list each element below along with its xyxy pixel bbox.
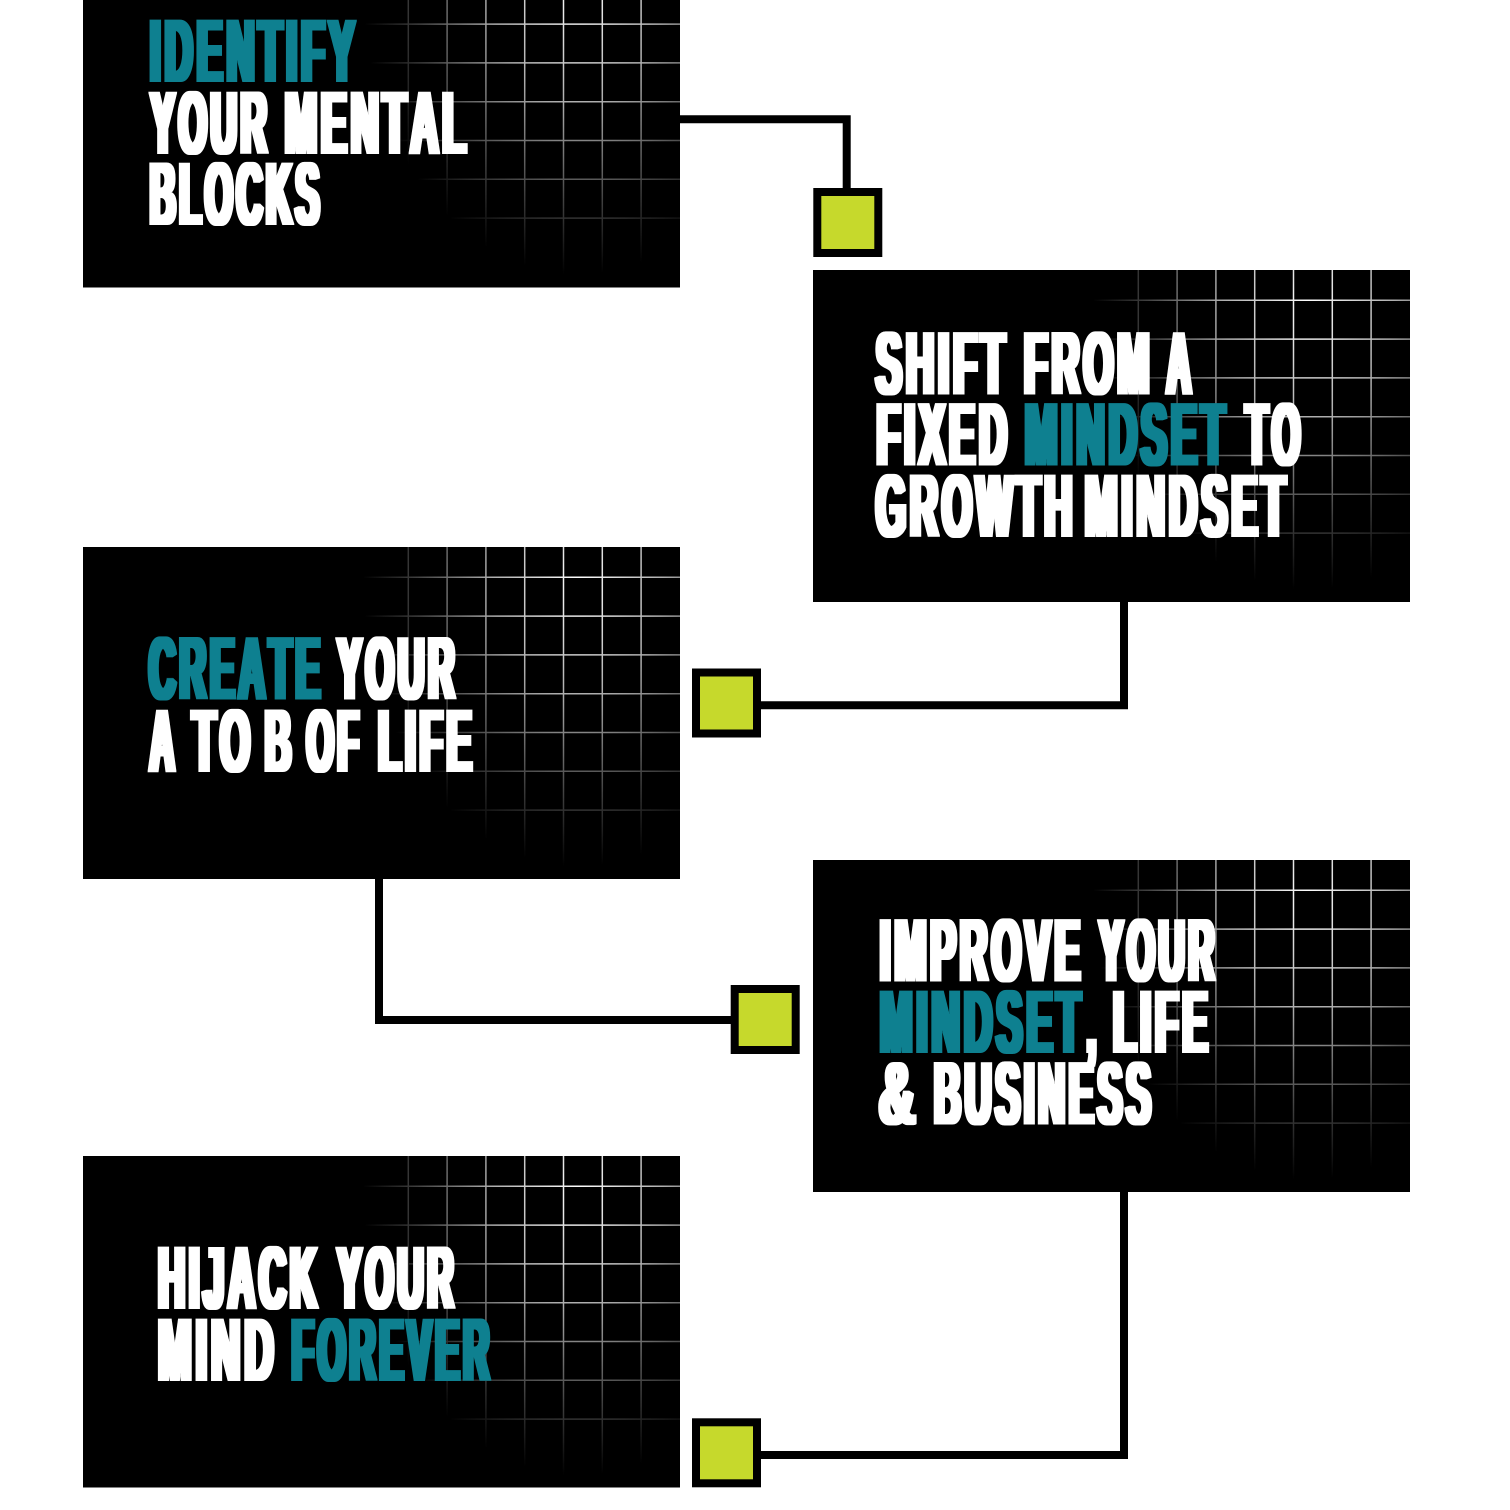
node: lime square 2 xyxy=(696,672,757,734)
panel grid xyxy=(813,270,1410,602)
panel: create your a to b of life xyxy=(83,547,680,879)
panel: hijack your mind forever xyxy=(83,1156,680,1488)
panel: create your a to b of life: LIFE xyxy=(378,690,476,790)
heading text: CREATE xyxy=(149,618,324,718)
panel: improve your mindset, life and business: LIFE xyxy=(1113,972,1212,1072)
node: lime square 4 xyxy=(696,1422,757,1483)
heading text: OF xyxy=(307,690,362,790)
panel: identify your mental blocks xyxy=(83,0,680,288)
node: lime square 3 xyxy=(735,989,796,1050)
connector: step 1 to step 2 xyxy=(680,119,847,190)
heading text: GROWTH xyxy=(876,456,1076,556)
heading text: IDENTIFY xyxy=(150,0,359,100)
panel: improve your mindset, life and business: YOUR xyxy=(1099,900,1218,1000)
panel background xyxy=(83,547,680,879)
heading text xyxy=(150,0,470,244)
panel background xyxy=(813,860,1410,1192)
panel: hijack your mind forever: FOREVER xyxy=(292,1300,493,1400)
heading text xyxy=(149,618,476,790)
heading text: A xyxy=(150,690,178,790)
heading text: BLOCKS xyxy=(150,144,323,244)
heading text: MIND xyxy=(158,1300,278,1400)
panel: identify your mental blocks: MENTAL xyxy=(285,72,470,172)
heading text: FROM xyxy=(1024,313,1154,413)
panel background xyxy=(83,0,680,288)
heading text: MINDSET xyxy=(1025,384,1229,484)
panel grid xyxy=(83,547,680,879)
heading text xyxy=(879,900,1218,1143)
node: lime square 1 xyxy=(817,192,878,253)
heading text: & xyxy=(879,1043,921,1143)
heading text xyxy=(876,313,1304,556)
heading text: B xyxy=(265,690,295,790)
panel: shift from a fixed mindset to growth mindset xyxy=(813,270,1410,602)
heading text: IMPROVE xyxy=(880,900,1084,1000)
heading text: BUSINESS xyxy=(934,1043,1155,1143)
heading text: HIJACK xyxy=(158,1228,321,1328)
heading text: FIXED xyxy=(877,384,1011,484)
connector: step 3 to step 4 xyxy=(379,878,732,1020)
connector: step 4 to step 5 xyxy=(760,1192,1124,1455)
heading text: SHIFT xyxy=(876,313,1009,413)
heading text: TO xyxy=(192,690,254,790)
heading text: A xyxy=(1167,313,1195,413)
panel grid xyxy=(83,0,680,287)
panel: shift from a fixed mindset to growth mindset: TO xyxy=(1246,384,1304,484)
heading text: MINDSET xyxy=(880,972,1085,1072)
heading text: YOUR xyxy=(338,1228,458,1328)
heading text: YOUR xyxy=(151,72,271,172)
panel: create your a to b of life: YOUR xyxy=(338,618,458,718)
panel grid xyxy=(83,1156,680,1487)
panel background xyxy=(83,1156,680,1488)
panel: improve your mindset, life and business xyxy=(813,860,1410,1192)
panel background xyxy=(813,270,1410,602)
connector: step 2 to step 3 xyxy=(760,602,1124,705)
panel grid xyxy=(813,860,1410,1192)
heading text: , xyxy=(1087,972,1096,1072)
heading text xyxy=(158,1228,493,1400)
